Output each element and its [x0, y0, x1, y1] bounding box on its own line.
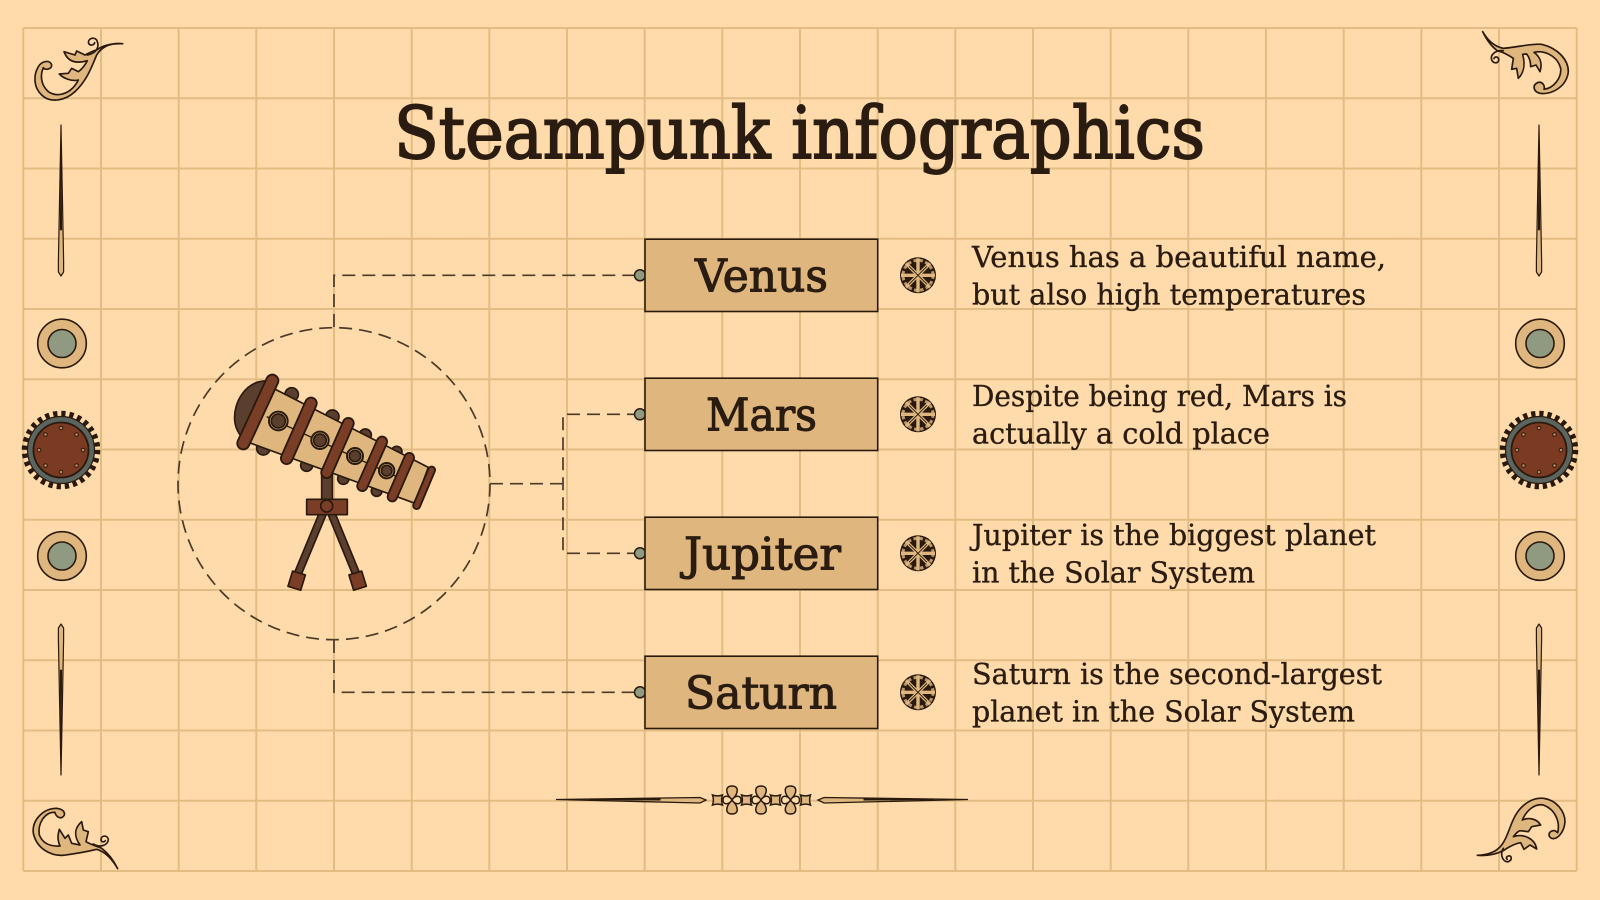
- telescope mount: [307, 499, 347, 515]
- bottom flourish divider: [556, 786, 968, 814]
- icon: medallion Jupiter: [900, 535, 936, 571]
- text block: Venus: Venus has a beautiful name,: [971, 240, 1386, 274]
- text block: Venus: but also high temperatures: [972, 278, 1366, 312]
- left needle bottom: [58, 624, 64, 775]
- telescope feet: [288, 571, 366, 590]
- text block: Jupiter: [969, 518, 1376, 590]
- connector dot: Saturn: [634, 687, 646, 698]
- label box: Saturn: Saturn: [685, 666, 837, 720]
- connector dot: Venus: [634, 270, 646, 281]
- connector dot: Mars: [634, 409, 646, 420]
- text block: Jupiter: in the Solar System: [972, 556, 1255, 590]
- left ring top: [38, 319, 86, 368]
- telescope stand post: [322, 470, 332, 503]
- label box: Mars: Mars: [706, 388, 817, 442]
- left ring bottom: [38, 532, 86, 580]
- right gear: [1503, 414, 1575, 486]
- telescope tube: [247, 387, 428, 503]
- dashed connectors: [178, 275, 640, 692]
- text block: Saturn: [972, 657, 1382, 728]
- icon: medallion Mars: [900, 396, 936, 432]
- text block: Venus: [971, 240, 1386, 312]
- right ring top: [1516, 319, 1564, 368]
- telescope icon: [235, 381, 432, 590]
- label box: Venus: Venus: [694, 250, 828, 302]
- label box: Mars: [645, 378, 878, 450]
- telescope bands: [243, 381, 432, 506]
- label box: Venus: [645, 239, 878, 312]
- right needle top: [1536, 125, 1542, 276]
- corner ornament: top left: [35, 38, 123, 100]
- text block: Saturn: planet in the Solar System: [972, 694, 1355, 728]
- title: Steampunk infographics: [394, 91, 1205, 175]
- left gear: [25, 414, 97, 486]
- connector dot: Jupiter: [634, 548, 646, 559]
- right needle bottom: [1536, 624, 1542, 775]
- text block: Saturn: Saturn is the second-largest: [972, 657, 1382, 691]
- telescope knobs: [257, 388, 402, 496]
- corner ornament: bottom right: [1477, 798, 1565, 862]
- telescope dome: [235, 381, 266, 437]
- telescope legs: [297, 508, 357, 575]
- label box: Saturn: [645, 656, 878, 728]
- icon: medallion Saturn: [900, 674, 936, 710]
- text block: Mars: Despite being red, Mars is: [972, 379, 1347, 413]
- label box: Jupiter: [645, 517, 878, 590]
- corner ornament: top right: [1483, 32, 1568, 94]
- text block: Mars: actually a cold place: [972, 416, 1270, 450]
- icon: medallion Venus: [900, 257, 936, 293]
- label box: Jupiter: Jupiter: [680, 528, 841, 580]
- telescope rivets: [269, 412, 394, 478]
- corner ornament: bottom left: [33, 808, 118, 869]
- left needle top: [58, 125, 64, 276]
- right ring bottom: [1516, 532, 1564, 580]
- text block: Jupiter: Jupiter is the biggest planet: [969, 518, 1376, 552]
- text block: Mars: [972, 379, 1347, 450]
